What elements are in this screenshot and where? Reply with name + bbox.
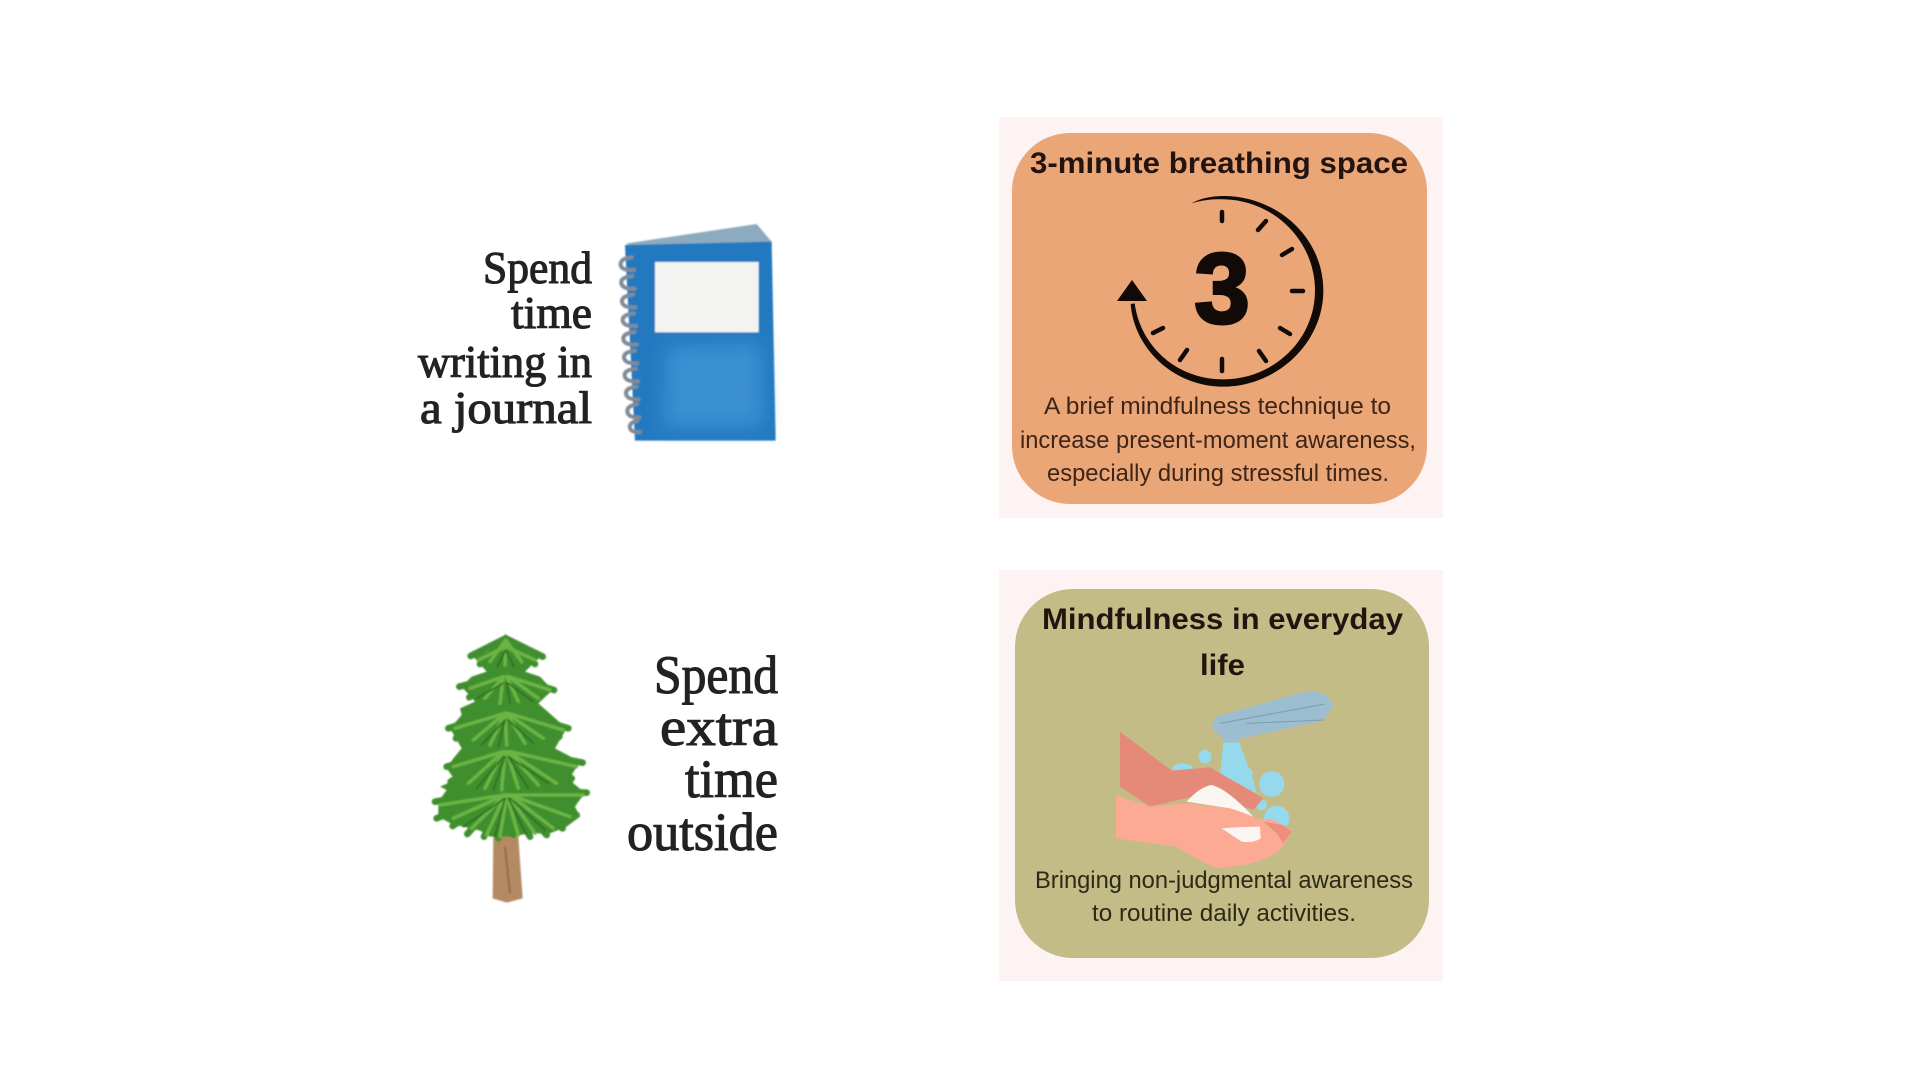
text: everyday mindfulness description: to routine daily activities. — [1092, 900, 1356, 927]
icon: three minute clock — [1117, 196, 1323, 387]
tree activity text — [627, 645, 778, 862]
text: breathing space description: A brief mindfulness technique to — [1044, 393, 1391, 420]
journal activity text: writing in — [418, 336, 592, 387]
journal activity text: Spend — [483, 242, 592, 293]
heading: mindfulness in everyday life: life — [1200, 649, 1245, 682]
tree activity text: time — [685, 749, 778, 809]
icon: three minute clock: 3 — [1194, 233, 1250, 345]
icon: pine tree — [435, 634, 587, 903]
heading: mindfulness in everyday life — [1042, 603, 1403, 682]
icon: hands washing under tap — [1116, 691, 1333, 868]
icon: blue spiral notebook — [621, 224, 776, 441]
text: breathing space description: especially during stressful times. — [1047, 460, 1389, 487]
journal activity text: time — [511, 287, 592, 338]
text: breathing space description — [1020, 393, 1416, 487]
panel: mindfulness in everyday life — [999, 570, 1443, 981]
text: breathing space description: increase present-moment awareness, — [1020, 427, 1416, 454]
journal activity text: a journal — [420, 382, 592, 433]
tree activity text: outside — [627, 802, 778, 862]
panel: 3-minute breathing space — [999, 117, 1443, 518]
tree activity text: Spend — [654, 645, 778, 705]
tree activity text: extra — [660, 697, 778, 757]
text: everyday mindfulness description — [1035, 867, 1413, 927]
text: everyday mindfulness description: Bringing non-judgmental awareness — [1035, 867, 1413, 894]
heading: mindfulness in everyday life: Mindfulness in everyday — [1042, 603, 1403, 636]
journal activity text — [418, 242, 592, 433]
heading: 3-minute breathing space: 3-minute breathing space — [1030, 147, 1408, 180]
